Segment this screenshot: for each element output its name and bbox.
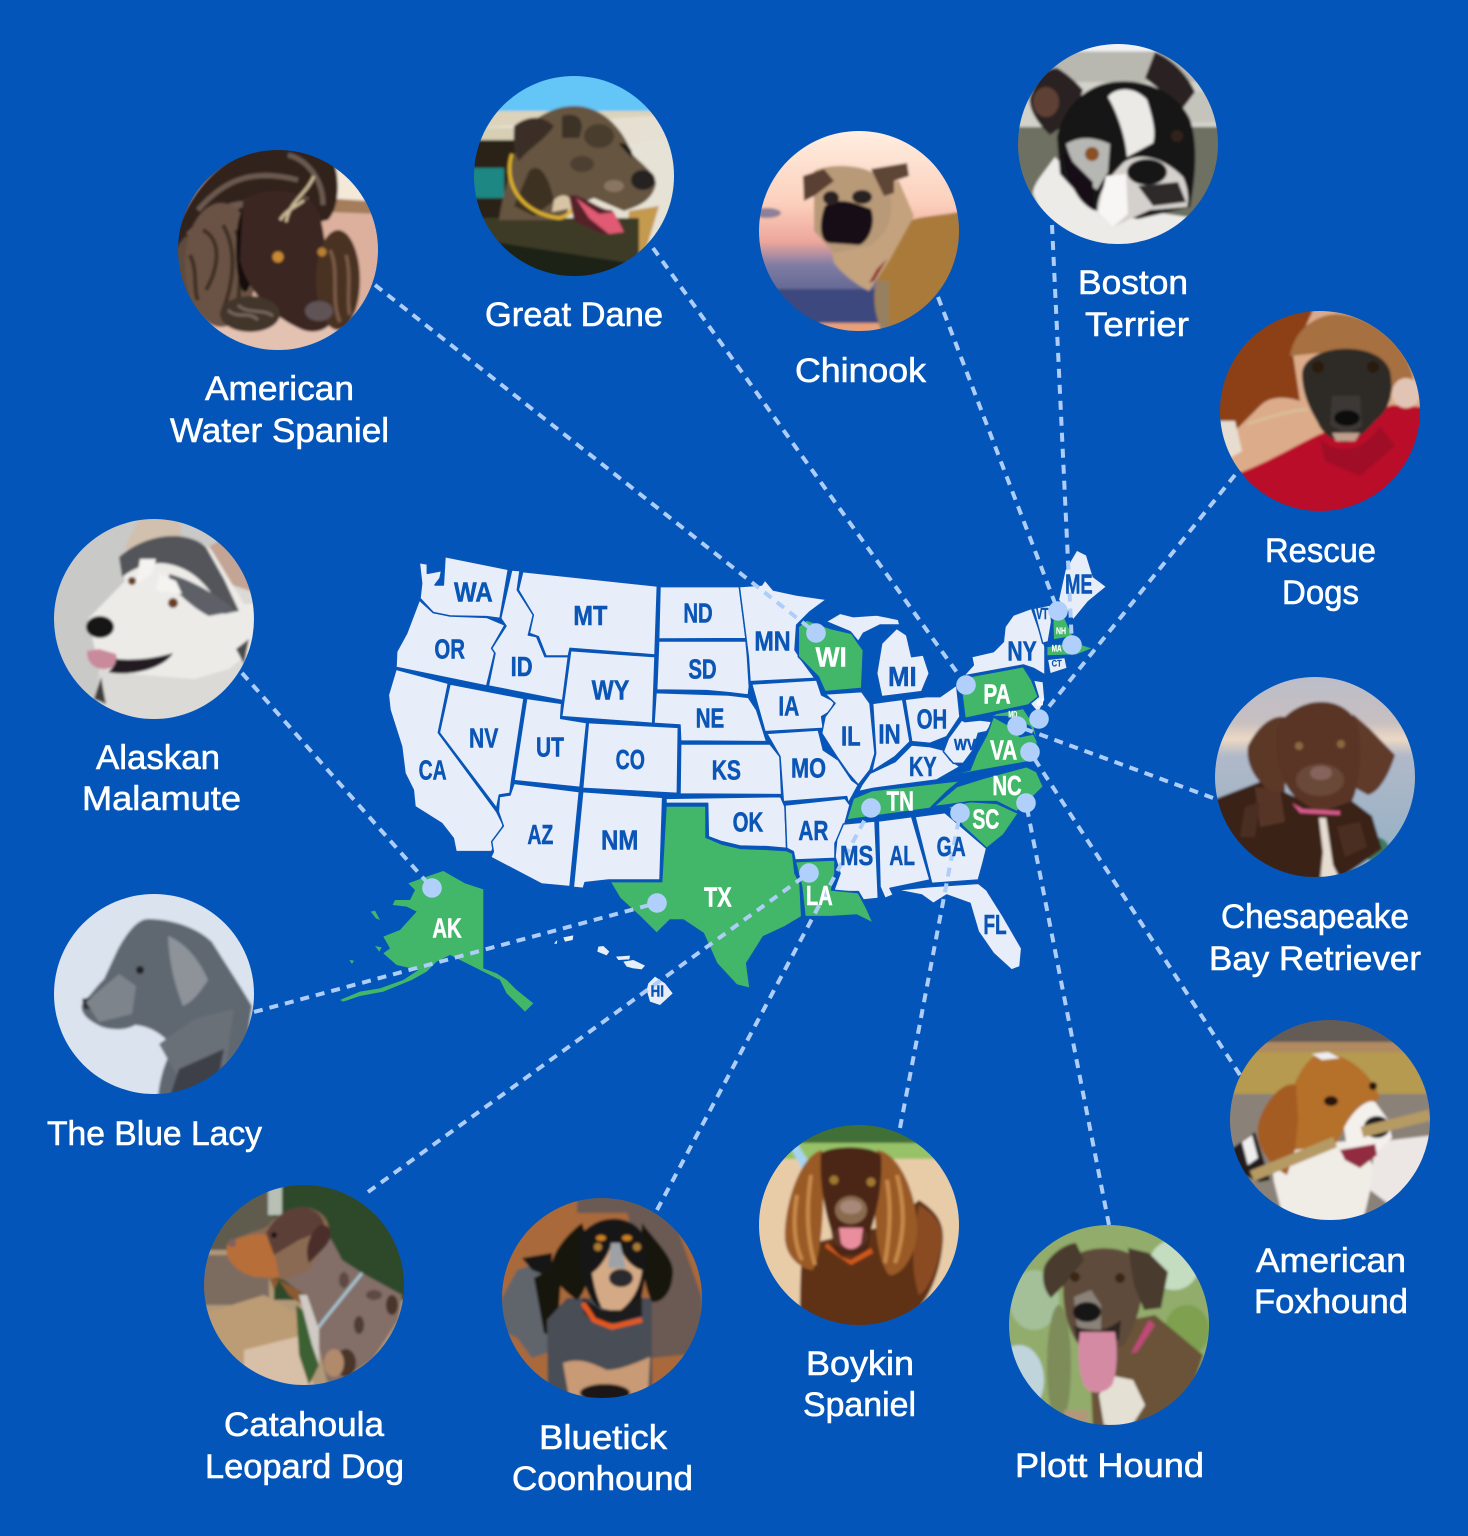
line: Chinook to New Hampshire [938, 297, 1058, 611]
line: Boston Terrier to Massachusetts [1052, 225, 1072, 645]
state abbreviation labels: OH [917, 703, 947, 734]
connector lines from dog photos to states [242, 225, 1240, 1225]
photo: Bluetick Coonhound [497, 1193, 707, 1403]
name: Chinook: Chinook [795, 352, 927, 390]
state abbreviation labels: VT [1036, 606, 1048, 623]
state abbreviation labels: NY [1007, 636, 1037, 667]
card: Chesapeake Bay Retriever [1209, 672, 1421, 978]
state abbreviation labels: UT [536, 732, 564, 763]
name: Catahoula Leopard Dog: Catahoula [224, 1406, 384, 1444]
name: Boston Terrier [1078, 264, 1189, 344]
state abbreviation labels: CA [419, 754, 447, 785]
line: Plott Hound to North Carolina [1026, 803, 1109, 1225]
photo: American Foxhound [1225, 1015, 1435, 1225]
card: Alaskan Malamute [49, 514, 259, 818]
state abbreviation labels: KY [909, 751, 937, 782]
line: Rescue Dogs to New Jersey [1039, 475, 1235, 719]
line: Catahoula Leopard Dog to Louisiana [368, 873, 809, 1192]
name: Chesapeake Bay Retriever [1209, 898, 1421, 978]
state abbreviation labels: AR [798, 815, 828, 846]
card: Boykin Spaniel [754, 1120, 964, 1424]
state abbreviation labels: NV [469, 722, 499, 753]
line: Chesapeake Bay Retriever to Maryland [1017, 726, 1213, 798]
photo: Boykin Spaniel [754, 1120, 964, 1330]
state abbreviation labels [419, 568, 1093, 1001]
state abbreviation labels: SC [972, 803, 999, 834]
line: Bluetick Coonhound to Tennessee [657, 808, 871, 1210]
photo: Chinook [759, 131, 959, 331]
name: American Water Spaniel: American [205, 370, 354, 408]
name: Boston Terrier: Terrier [1085, 306, 1189, 344]
photo: Chesapeake Bay Retriever [1210, 672, 1420, 882]
state abbreviation labels: KS [712, 754, 741, 785]
state abbreviation labels: AZ [527, 819, 553, 850]
photo: Alaskan Malamute [49, 514, 259, 724]
card: American Water Spaniel [170, 145, 389, 450]
photo: Great Dane [474, 76, 674, 276]
state abbreviation labels: WI [816, 642, 847, 673]
name: Boykin Spaniel [803, 1345, 916, 1424]
card: Rescue Dogs [1210, 306, 1425, 612]
card: The Blue Lacy [47, 889, 262, 1153]
line: Alaskan Malamute to Alaska [242, 673, 432, 888]
state abbreviation labels: IL [841, 721, 861, 752]
state abbreviation labels: IA [778, 691, 799, 722]
card: Chinook [753, 126, 964, 390]
state abbreviation labels: WY [592, 674, 630, 705]
name: Catahoula Leopard Dog [205, 1406, 404, 1486]
map: United States state shapes [340, 550, 1107, 1012]
line: Boykin Spaniel to South Carolina [900, 813, 960, 1128]
name: American Foxhound: American [1256, 1242, 1406, 1280]
state abbreviation labels: WA [454, 577, 493, 608]
state abbreviation labels: SD [688, 653, 717, 684]
name: Alaskan Malamute: Malamute [82, 780, 241, 818]
state abbreviation labels: CO [616, 744, 645, 775]
state abbreviation labels: PA [983, 678, 1011, 709]
name: The Blue Lacy: The Blue Lacy [47, 1115, 262, 1153]
state abbreviation labels: NE [696, 703, 724, 734]
name: Catahoula Leopard Dog: Leopard Dog [205, 1448, 404, 1486]
state abbreviation labels: ID [511, 651, 533, 682]
line: Great Dane to Pennsylvania [653, 248, 966, 685]
state abbreviation labels: AK [432, 913, 462, 944]
state abbreviation labels: CT [1052, 659, 1062, 669]
name: American Water Spaniel [170, 370, 389, 450]
line: The Blue Lacy to Texas [254, 903, 657, 1012]
state location dots [422, 601, 1082, 913]
name: Bluetick Coonhound: Bluetick [539, 1419, 668, 1457]
line: American Water Spaniel to Wisconsin [375, 285, 816, 633]
state abbreviation labels: AL [889, 840, 915, 871]
name: Great Dane: Great Dane [485, 296, 663, 334]
state abbreviation labels: MO [791, 753, 826, 784]
state abbreviation labels: WV [954, 737, 976, 754]
state abbreviation labels: MI [888, 661, 917, 692]
line: American Foxhound to Virginia [1030, 752, 1240, 1075]
state abbreviation labels: ME [1065, 568, 1093, 599]
photo: Boston Terrier [1013, 39, 1223, 249]
name: Rescue Dogs: Dogs [1282, 574, 1359, 612]
name: Chesapeake Bay Retriever: Chesapeake [1221, 898, 1409, 936]
photo: Rescue Dogs [1220, 311, 1420, 511]
photo: Catahoula Leopard Dog [199, 1180, 409, 1390]
state abbreviation labels: FL [983, 909, 1007, 940]
name: Alaskan Malamute [82, 739, 241, 818]
card: Catahoula Leopard Dog [199, 1180, 409, 1486]
card: Bluetick Coonhound [497, 1193, 707, 1498]
name: American Water Spaniel: Water Spaniel [170, 412, 389, 450]
state abbreviation labels: GA [937, 831, 966, 862]
name: Bluetick Coonhound: Coonhound [512, 1460, 693, 1498]
name: Rescue Dogs [1265, 532, 1376, 612]
name: Alaskan Malamute: Alaskan [96, 739, 220, 777]
card: Plott Hound [1009, 1225, 1209, 1478]
name: Boykin Spaniel: Spaniel [803, 1386, 916, 1424]
name: Bluetick Coonhound [512, 1419, 693, 1498]
name: Boston Terrier: Boston [1078, 264, 1188, 302]
state abbreviation labels: NJ [1037, 698, 1043, 708]
state abbreviation labels: LA [806, 880, 833, 911]
name: American Foxhound [1254, 1242, 1408, 1321]
card: American Foxhound [1225, 1015, 1435, 1321]
name: Chesapeake Bay Retriever: Bay Retriever [1209, 940, 1421, 978]
state abbreviation labels: NM [601, 824, 638, 855]
state abbreviation labels: TN [887, 786, 914, 817]
state abbreviation labels: NC [992, 770, 1022, 801]
state abbreviation labels: ND [683, 598, 713, 629]
state abbreviation labels: VA [990, 734, 1017, 765]
state abbreviation labels: OK [733, 807, 763, 838]
state abbreviation labels: TX [704, 882, 732, 913]
card: Great Dane [469, 71, 679, 334]
photo: American Water Spaniel [172, 145, 383, 355]
state abbreviation labels: MN [754, 626, 791, 657]
state abbreviation labels: MD [1008, 709, 1017, 719]
state abbreviation labels: HI [651, 984, 664, 1001]
state abbreviation labels: MA [1052, 644, 1062, 654]
photo: The Blue Lacy [49, 889, 259, 1099]
state abbreviation labels: NH [1056, 626, 1066, 636]
name: American Foxhound: Foxhound [1254, 1283, 1408, 1321]
state abbreviation labels: IN [878, 718, 901, 749]
name: Plott Hound: Plott Hound [1015, 1447, 1204, 1485]
card: Boston Terrier [1013, 39, 1223, 344]
photo: Plott Hound [1009, 1225, 1209, 1425]
state abbreviation labels: MS [840, 840, 873, 871]
name: Rescue Dogs: Rescue [1265, 532, 1376, 570]
state abbreviation labels: MT [573, 600, 607, 631]
state abbreviation labels: OR [434, 633, 465, 664]
name: Boykin Spaniel: Boykin [806, 1345, 914, 1383]
